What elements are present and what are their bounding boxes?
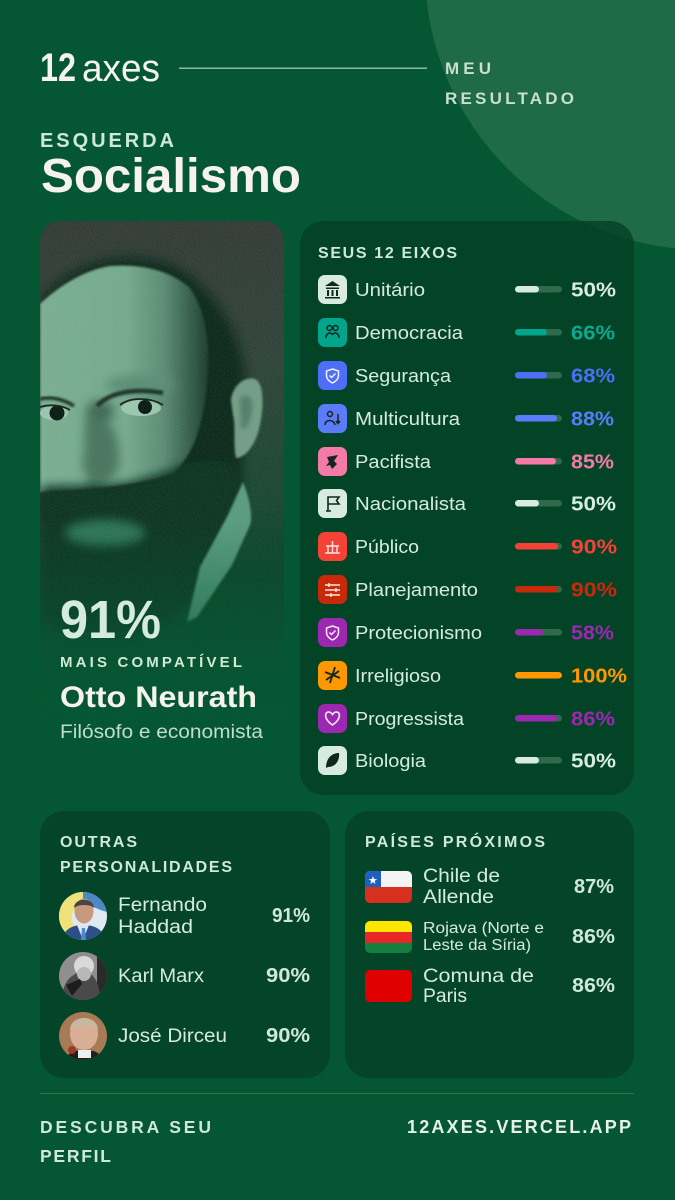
name: Otto Neurath xyxy=(60,681,257,714)
heading: SEUS 12 EIXOS xyxy=(318,245,457,262)
beard xyxy=(40,461,238,637)
row: Rojava xyxy=(365,920,615,954)
row: Chile de Allende: Allende xyxy=(423,887,494,908)
ideology heading: Socialismo xyxy=(41,150,301,203)
brows xyxy=(40,398,74,406)
ideology heading: ESQUERDA xyxy=(40,130,174,152)
row: Chile de Allende xyxy=(365,868,614,903)
row: Progressista xyxy=(318,704,615,733)
panel: other personalities xyxy=(40,811,330,1078)
row: Multicultura: 88% xyxy=(571,408,614,430)
label: meu resultado xyxy=(445,59,574,108)
row: Público: Público xyxy=(355,536,419,557)
row: Irreligioso: Irreligioso xyxy=(355,665,441,686)
logo: 12 axes: 12 xyxy=(40,46,76,90)
row: Fernando Haddad: Haddad xyxy=(118,917,193,938)
caption: MAIS COMPATÍVEL xyxy=(60,654,242,671)
ear xyxy=(231,378,263,458)
row: Biologia: Biologia xyxy=(355,750,427,771)
row: Progressista: 86% xyxy=(571,708,615,730)
row: Fernando Haddad: 91% xyxy=(272,905,310,927)
heading xyxy=(60,834,232,876)
role: Filósofo e economista xyxy=(60,722,263,743)
row: José Dirceu: José Dirceu xyxy=(118,1026,227,1047)
row: Pacifista: Pacifista xyxy=(355,451,432,472)
collar xyxy=(187,482,251,622)
row: Rojava: 86% xyxy=(572,926,615,948)
row: Rojava: Rojava (Norte e xyxy=(423,920,544,937)
portrait of Otto Neurath xyxy=(40,221,284,660)
row: José Dirceu xyxy=(59,1012,310,1060)
row: Segurança: 68% xyxy=(571,364,615,388)
decorative circle xyxy=(425,0,675,250)
row: Nacionalista xyxy=(318,489,616,518)
row: Irreligioso xyxy=(318,661,627,690)
footer: call to action xyxy=(40,1117,211,1166)
label: meu resultado: MEU xyxy=(445,59,491,78)
row: Nacionalista: 50% xyxy=(571,492,616,516)
row: Irreligioso: 100% xyxy=(571,664,627,688)
heading: PAÍSES PRÓXIMOS xyxy=(365,832,545,851)
footer: url: 12AXES.VERCEL.APP xyxy=(407,1117,631,1137)
row: Progressista: Progressista xyxy=(355,708,465,729)
row: Segurança xyxy=(318,361,615,390)
row: José Dirceu: 90% xyxy=(266,1025,310,1047)
row: Pacifista xyxy=(318,447,614,476)
row: Democracia xyxy=(318,318,615,347)
row: Planejamento: 90% xyxy=(571,578,617,602)
row: Público: 90% xyxy=(571,536,617,558)
nose and eye shadows xyxy=(83,416,119,483)
row: Fernando Haddad xyxy=(59,892,310,940)
row: Público xyxy=(318,532,617,561)
row: Comuna de Paris xyxy=(365,966,615,1007)
row: Pacifista: 85% xyxy=(571,450,614,474)
score: 91% xyxy=(60,590,161,650)
row: Segurança: Segurança xyxy=(355,365,452,386)
row: Rojava: Leste da Síria) xyxy=(423,937,531,954)
row: Nacionalista: Nacionalista xyxy=(355,493,467,514)
panel: your 12 axes xyxy=(300,221,634,795)
row: Democracia: 66% xyxy=(571,322,615,344)
row: Multicultura: Multicultura xyxy=(355,408,461,429)
row: Comuna de Paris: Paris xyxy=(423,986,467,1007)
row: Protecionismo: Protecionismo xyxy=(355,622,482,643)
footer: call to action: PERFIL xyxy=(40,1146,111,1166)
row: Planejamento xyxy=(318,575,617,604)
row: Protecionismo: 58% xyxy=(571,622,614,644)
label: meu resultado: RESULTADO xyxy=(445,89,574,108)
logo: 12 axes: axes xyxy=(82,48,160,90)
row: Unitário xyxy=(318,275,616,304)
row: Karl Marx: 90% xyxy=(266,965,310,987)
eyes xyxy=(121,400,161,416)
panel: nearby countries xyxy=(345,811,634,1078)
row: Chile de Allende: Chile de xyxy=(423,866,500,887)
row: Karl Marx xyxy=(59,952,310,1000)
logo: 12 axes xyxy=(40,46,160,90)
row: Planejamento: Planejamento xyxy=(355,579,478,600)
row: Unitário: Unitário xyxy=(355,279,425,300)
row: Biologia: 50% xyxy=(571,750,616,772)
row: Multicultura xyxy=(318,404,614,433)
heading: OUTRAS xyxy=(60,834,137,851)
row: Chile de Allende: ★ xyxy=(368,875,378,887)
row: Comuna de Paris: Comuna de xyxy=(423,966,534,987)
row: Karl Marx: Karl Marx xyxy=(118,966,205,987)
row: Protecionismo xyxy=(318,618,614,647)
row: Chile de Allende: 87% xyxy=(574,876,614,898)
row: Fernando Haddad: Fernando xyxy=(118,895,207,916)
row: Biologia xyxy=(318,746,616,775)
row: Unitário: 50% xyxy=(571,278,616,302)
row: Comuna de Paris: 86% xyxy=(572,975,615,997)
panel: best match portrait card xyxy=(40,221,284,795)
heading: PERSONALIDADES xyxy=(60,859,232,876)
row: Democracia: Democracia xyxy=(355,322,464,343)
footer: call to action: DESCUBRA SEU xyxy=(40,1117,211,1137)
